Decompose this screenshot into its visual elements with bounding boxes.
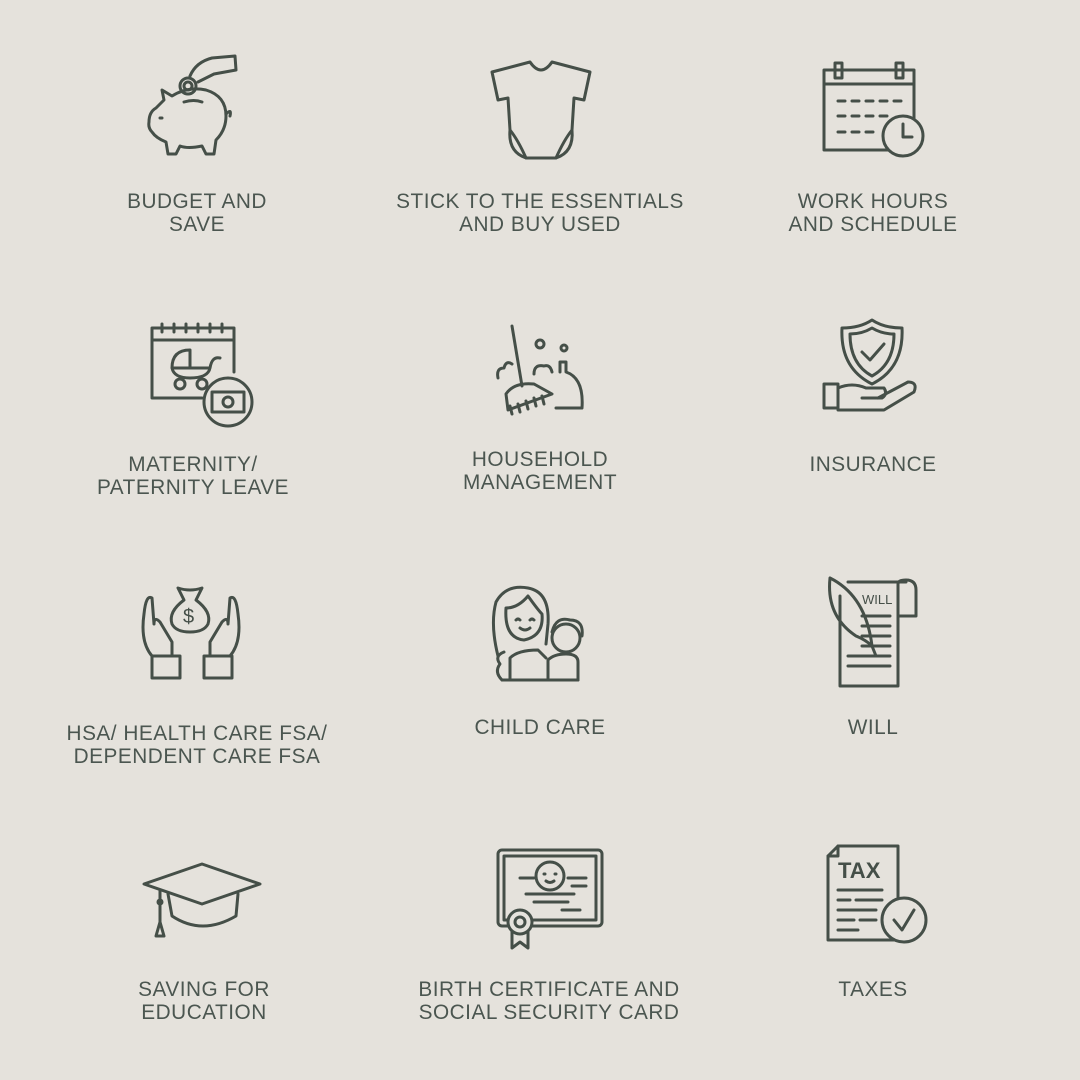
icon: tax document with check: TAX: [838, 858, 881, 883]
icon: calendar with clock: [822, 62, 924, 158]
label: maternity: PATERNITY LEAVE: [97, 476, 289, 499]
label: work hours: WORK HOURS: [798, 190, 948, 213]
label: hsa: DEPENDENT CARE FSA: [74, 745, 320, 768]
label: taxes: TAXES: [838, 978, 908, 1001]
icon: shield and hand: [822, 318, 917, 412]
label: work hours: [788, 190, 957, 236]
icon: baby onesie: [490, 60, 592, 160]
icon: birth certificate: [496, 848, 604, 950]
label: will: WILL: [848, 716, 898, 739]
label: birth certificate: [418, 978, 680, 1024]
label: budget: BUDGET AND: [127, 190, 267, 213]
label: household: HOUSEHOLD: [472, 448, 608, 471]
icon: will document with quill: [828, 576, 918, 688]
label: birth certificate: BIRTH CERTIFICATE AND: [418, 978, 680, 1001]
icon: graduation cap: [142, 862, 262, 938]
icon: hands with money bag: [142, 586, 240, 680]
label: household: [463, 448, 617, 494]
icon: tax document with check: [826, 844, 928, 944]
icon: broom and dustpan: [496, 324, 584, 416]
label: insurance: INSURANCE: [810, 453, 936, 476]
label: budget: SAVE: [169, 213, 225, 236]
label: essentials: [396, 190, 684, 236]
label: saving for education: SAVING FOR: [138, 978, 270, 1001]
label: saving for education: [138, 978, 270, 1024]
label: saving for education: EDUCATION: [141, 1001, 267, 1024]
icon: piggy bank: [147, 54, 238, 156]
icon: will document with quill: WILL: [862, 592, 892, 607]
label: household: MANAGEMENT: [463, 471, 617, 494]
label: essentials: STICK TO THE ESSENTIALS: [396, 190, 684, 213]
label: budget: [127, 190, 267, 236]
icon: hands with money bag: $: [183, 606, 194, 628]
icon: maternity calendar: [150, 322, 254, 428]
label: essentials: AND BUY USED: [459, 213, 621, 236]
icon: mother and child: [492, 586, 584, 682]
label: hsa: [67, 722, 327, 768]
label: work hours: AND SCHEDULE: [789, 213, 957, 236]
label: maternity: MATERNITY/: [128, 453, 258, 476]
label: birth certificate: SOCIAL SECURITY CARD: [419, 1001, 679, 1024]
label: maternity: [97, 453, 289, 499]
label: child care: CHILD CARE: [475, 716, 605, 739]
label: hsa: HSA/ HEALTH CARE FSA/: [67, 722, 327, 745]
